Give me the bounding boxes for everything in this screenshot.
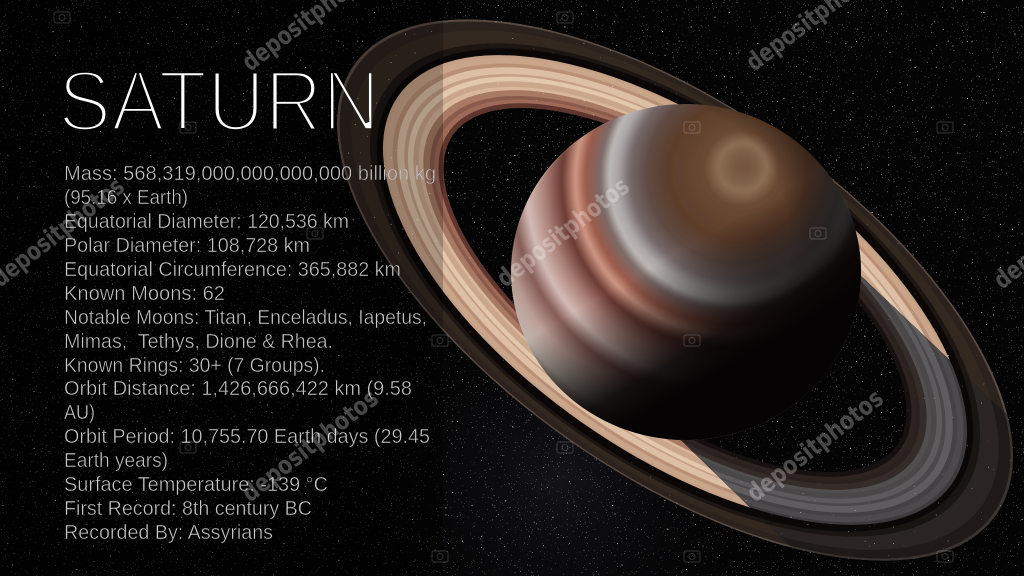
facts text block: AU) [64,402,95,424]
facts text block: Recorded By: Assyrians [64,522,273,544]
facts text block: Mass: 568,319,000,000,000,000 billion kg [64,163,436,185]
facts text block: Equatorial Diameter: 120,536 km [64,211,349,233]
facts text block: (95.16 x Earth) [64,187,188,209]
watermarks: depositphotos [741,383,889,508]
ring section in planet shadow [680,276,1013,560]
planetary rings [337,19,1013,561]
watermarks: depositphotos [236,383,384,508]
facts text block: Notable Moons: Titan, Enceladus, Iapetus, [64,307,427,329]
watermarks: depositphotos [491,171,635,293]
facts text block [64,163,436,544]
facts text block: Surface Temperature: -139 °C [64,474,328,496]
planet Saturn [511,104,861,440]
facts text block: Known Moons: 62 [64,283,225,305]
facts text block: Polar Diameter: 108,728 km [64,235,310,257]
title: SATURN [58,53,380,149]
facts text block: Orbit Distance: 1,426,666,422 km (9.58 [64,378,412,400]
facts text block: Mimas, Tethys, Dione & Rhea. [64,331,333,353]
lit ring bands [337,19,1013,561]
facts text block: Equatorial Circumference: 365,882 km [64,259,401,281]
facts text block: Earth years) [64,450,168,472]
facts text block: First Record: 8th century BC [64,498,312,520]
facts text block: Orbit Period: 10,755.70 Earth days (29.45 [64,426,430,448]
facts text block: Known Rings: 30+ (7 Groups). [64,355,325,377]
